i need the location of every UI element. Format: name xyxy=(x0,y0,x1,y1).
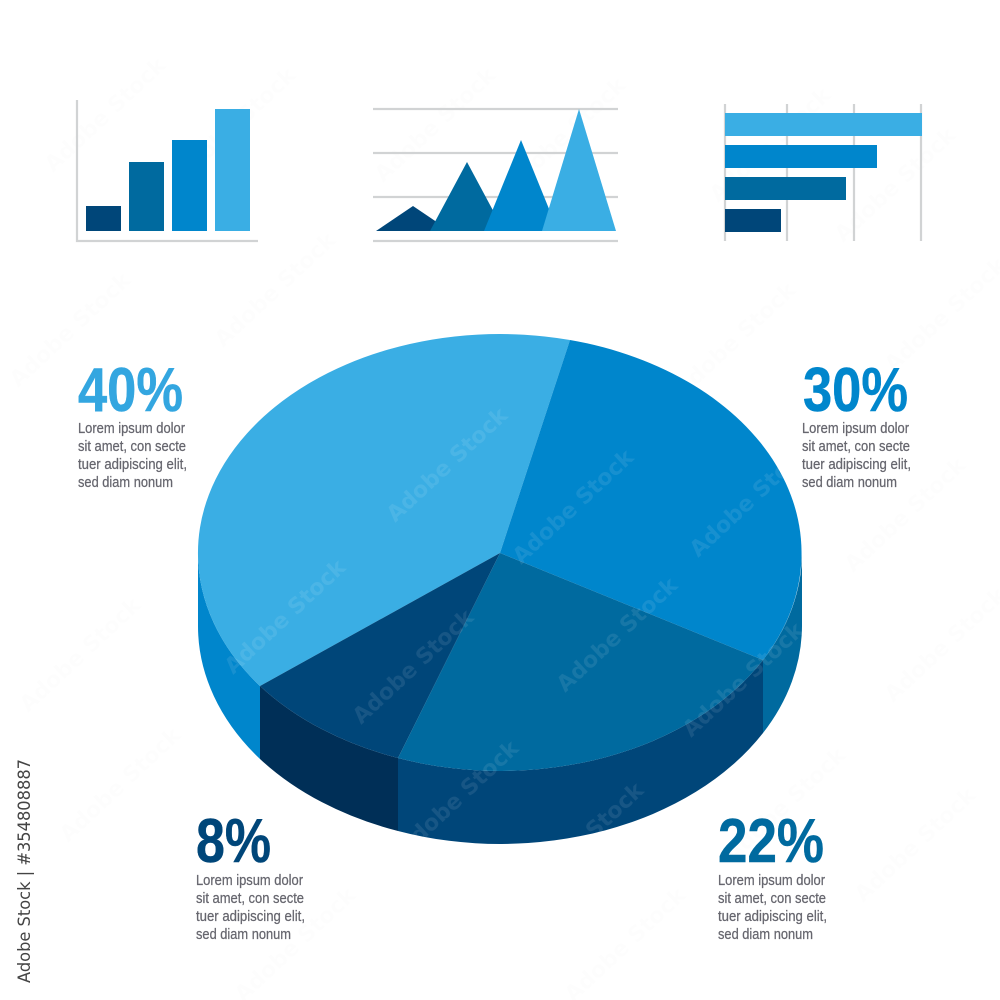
top slice: 40% xyxy=(198,334,570,686)
watermark on background: Adobe Stock xyxy=(5,267,137,392)
callout: 30%: Lorem ipsum dolor xyxy=(802,421,909,437)
callout: 30% xyxy=(802,356,911,491)
side wall: 22% slice xyxy=(398,660,763,844)
watermark on background: Adobe Stock xyxy=(55,722,187,847)
callout: 8%: sit amet, con secte xyxy=(196,891,304,907)
watermark on background: Adobe Stock xyxy=(500,72,632,197)
callout: 22%: sit amet, con secte xyxy=(718,891,826,907)
side wall: 8% slice xyxy=(260,686,398,831)
callout: 8%: sed diam nonum xyxy=(196,927,291,943)
watermark on background: Adobe Stock xyxy=(720,742,852,867)
horizontal bar chart xyxy=(725,104,922,241)
watermark on pie: Adobe Stock xyxy=(685,437,817,562)
watermark on background: Adobe Stock xyxy=(850,782,982,907)
side wall: 40% slice xyxy=(198,553,260,759)
callout: 40%: Lorem ipsum dolor xyxy=(78,421,185,437)
watermark on background: Adobe Stock xyxy=(40,52,172,177)
watermark on background: Adobe Stock xyxy=(15,592,147,717)
side wall: 30% slice xyxy=(763,553,802,733)
callout: 40%: 40% xyxy=(78,356,183,425)
callout: 8% xyxy=(196,807,305,943)
watermark on pie: Adobe Stock xyxy=(393,735,525,860)
callout: 22%: Lorem ipsum dolor xyxy=(718,873,825,889)
watermark on background: Adobe Stock xyxy=(670,277,802,402)
top slice: 30% xyxy=(500,340,802,660)
watermark on pie xyxy=(220,402,817,902)
callout: 40%: tuer adipiscing elit, xyxy=(78,457,187,473)
callout: 22%: 22% xyxy=(718,807,824,876)
callout: 40%: sed diam nonum xyxy=(78,475,173,491)
watermark on background: Adobe Stock xyxy=(370,62,502,187)
watermark on background: Adobe Stock xyxy=(705,82,837,207)
callout: 30%: tuer adipiscing elit, xyxy=(802,457,911,473)
stock id label: Adobe Stock | #354808887 xyxy=(15,759,35,983)
top slice: 22% xyxy=(398,553,763,771)
top slice: 8% xyxy=(260,553,500,758)
watermark on pie: Adobe Stock xyxy=(220,554,352,679)
callout: 8%: 8% xyxy=(196,807,271,876)
watermark on background: Adobe Stock xyxy=(840,452,972,577)
watermark on pie: Adobe Stock xyxy=(382,402,514,527)
watermark on pie: Adobe Stock xyxy=(552,572,684,697)
callout: 22%: tuer adipiscing elit, xyxy=(718,909,827,925)
callout: 40% xyxy=(78,356,187,491)
watermark on pie: Adobe Stock xyxy=(508,444,640,569)
watermark on background: Adobe Stock xyxy=(210,227,342,352)
watermark on background: Adobe Stock xyxy=(170,62,302,187)
callout: 30%: sed diam nonum xyxy=(802,475,897,491)
watermark on pie: Adobe Stock xyxy=(678,617,810,742)
watermark on pie: Adobe Stock xyxy=(518,777,650,902)
column chart xyxy=(77,100,258,241)
callout: 30%: 30% xyxy=(803,356,908,425)
watermark on pie: Adobe Stock xyxy=(348,604,480,729)
callout: 22% xyxy=(718,807,827,943)
callout: 22%: sed diam nonum xyxy=(718,927,813,943)
watermark on background: Adobe Stock xyxy=(830,122,962,247)
callout: 30%: sit amet, con secte xyxy=(802,439,910,455)
3D pie chart xyxy=(198,334,802,844)
callout: 8%: Lorem ipsum dolor xyxy=(196,873,303,889)
triangle area chart xyxy=(373,109,618,241)
callout: 8%: tuer adipiscing elit, xyxy=(196,909,305,925)
callout: 40%: sit amet, con secte xyxy=(78,439,186,455)
